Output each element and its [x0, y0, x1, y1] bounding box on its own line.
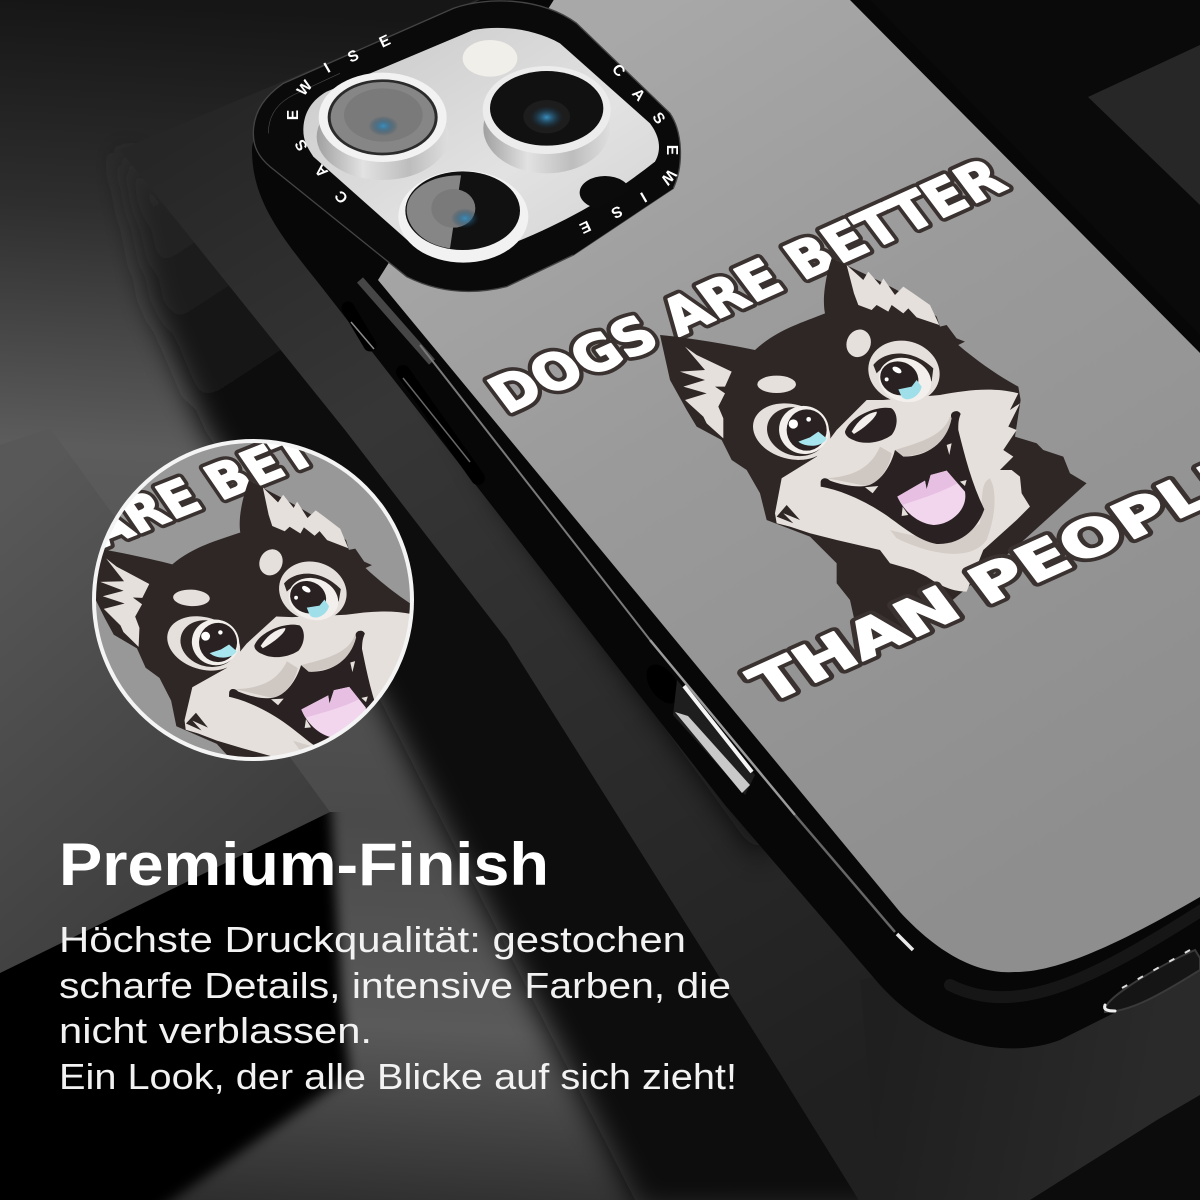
print: dog face — [660, 258, 1087, 630]
body text: nicht verblassen. — [59, 1010, 372, 1051]
camera module — [253, 1, 680, 292]
side slot — [348, 308, 370, 345]
ring lettering: CASEWISE: A — [628, 85, 648, 105]
body text: Höchste Druckqualität: gestochen — [59, 919, 686, 960]
ring lettering: CASEWISE: S — [608, 202, 625, 222]
case bevel — [360, 280, 432, 362]
ring lettering: CASEWISE: I — [321, 60, 333, 77]
ring lettering: CASEWISE: C — [608, 61, 628, 80]
ring lettering: CASEWISE: S — [648, 109, 668, 127]
ring band overlay — [560, 170, 673, 255]
ring lettering: CASEWISE: S — [345, 47, 362, 67]
inset magnifier circle — [92, 439, 414, 761]
ring lettering: CASEWISE: E — [377, 32, 393, 52]
ring lettering: CASEWISE: S — [292, 136, 312, 154]
heading: Premium-Finish — [59, 831, 549, 898]
print: THAN PEOPLE: THAN PEOPLE — [737, 443, 1200, 714]
thin ring highlight — [268, 73, 340, 133]
ring lettering: CASEWISE: W — [294, 77, 317, 99]
camera glass window — [303, 28, 659, 256]
volume buttons — [403, 372, 478, 478]
print: DOGS ARE BETTER: DOGS ARE BETTER — [477, 148, 1017, 424]
phone back: grey print surface — [378, 0, 1200, 972]
lens: bottom — [398, 171, 528, 263]
ring lettering: CASEWISE: E — [663, 145, 680, 155]
ring lettering: CASEWISE: E — [577, 217, 593, 237]
lens: top right — [483, 66, 611, 173]
print: DOGS ARE BETTER: DOGS ARE BETTER — [477, 148, 1017, 424]
body text — [59, 919, 737, 1097]
camera bump outer ring — [253, 1, 680, 292]
silver side button — [640, 659, 686, 709]
ring lettering: CASEWISE: A — [312, 161, 332, 180]
print: THAN PEOPLE: THAN PEOPLE — [737, 443, 1200, 714]
phone case body — [252, 0, 1200, 1048]
ring lettering: CASEWISE: W — [657, 166, 679, 188]
ring lettering: CASEWISE: I — [637, 188, 649, 205]
body text: scharfe Details, intensive Farben, die — [59, 965, 731, 1006]
body text: Ein Look, der alle Blicke auf sich zieht! — [59, 1056, 737, 1097]
ring lettering: CASEWISE — [285, 32, 680, 237]
ring lettering: CASEWISE: E — [285, 110, 302, 120]
sensor — [580, 176, 630, 209]
flash — [463, 40, 517, 77]
charging port — [1105, 950, 1200, 1012]
ring lettering: CASEWISE: C — [332, 187, 352, 206]
lens: top left — [317, 73, 449, 180]
